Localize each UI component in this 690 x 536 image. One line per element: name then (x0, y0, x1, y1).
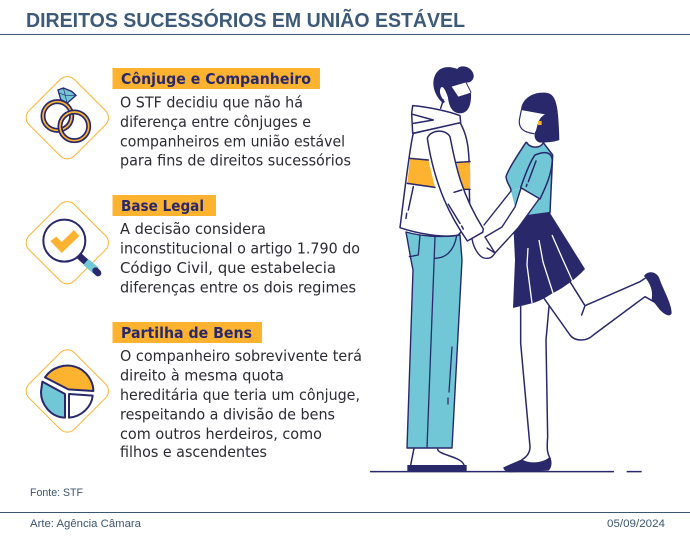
credit: Arte: Agência Câmara (30, 518, 142, 530)
text block: base legal: A decisão considera (120, 220, 266, 238)
text block: partilha de bens: com outros herdeiros, como (120, 425, 322, 443)
text block: base legal: inconstitucional o artigo 1.790 do (120, 240, 360, 258)
icon: pie chart (22, 346, 113, 436)
woman: standing and raised legs (521, 278, 657, 460)
man: jeans pockets (409, 235, 457, 258)
icon: wedding rings (22, 72, 113, 163)
man: hair and beard (433, 66, 474, 113)
heading: partilha de bens: Partilha de Bens (121, 324, 252, 342)
woman: arm (484, 188, 539, 253)
woman: hair and earring (519, 93, 559, 143)
woman: shoes (503, 272, 672, 472)
man: sleeve (427, 131, 483, 241)
woman: skirt (513, 213, 585, 308)
panel: cônjuge e companheiro (22, 68, 351, 170)
heading: cônjuge e companheiro: Cônjuge e Companheiro (121, 70, 311, 88)
woman: shirt sleeve (521, 153, 552, 199)
text block: cônjuge e companheiro: para fins de direitos sucessórios (120, 152, 351, 170)
man: jeans (406, 232, 462, 448)
text block: partilha de bens: respeitando a divisão de bens (120, 406, 335, 424)
text block: partilha de bens: direito à mesma quota (120, 366, 284, 384)
clasped hands (472, 239, 495, 258)
text block: partilha de bens: hereditária que teria um cônjuge, (120, 386, 360, 404)
text block: partilha de bens: filhos e ascendentes (120, 443, 267, 461)
man: hood and torso (400, 100, 470, 236)
text block: cônjuge e companheiro: companheiros em união estável (120, 132, 345, 150)
text block: partilha de bens: O companheiro sobrevivente terá (120, 347, 362, 365)
text block: cônjuge e companheiro: diferença entre cônjuges e (120, 113, 311, 131)
panel: partilha de bens (22, 322, 362, 461)
icon: magnifying glass with check (22, 197, 113, 288)
text block: partilha de bens (120, 347, 362, 461)
man: shoe (407, 448, 467, 471)
source note: Fonte: STF (30, 487, 83, 499)
man: jeans seam and creases (427, 237, 452, 448)
text block: cônjuge e companheiro: O STF decidiu que não há (120, 94, 303, 112)
heading: base legal: Base Legal (121, 197, 204, 215)
date: 05/09/2024 (607, 518, 665, 530)
text block: base legal (120, 220, 360, 296)
text block: cônjuge e companheiro (120, 94, 351, 170)
text block: base legal: diferenças entre os dois regimes (120, 278, 356, 296)
ground line (370, 469, 642, 474)
woman: shirt (506, 142, 553, 217)
illustration: couple holding hands (370, 66, 672, 472)
panel: base legal (22, 195, 360, 296)
text block: base legal: Código Civil, que estabelecia (120, 259, 336, 277)
title: DIREITOS SUCESSÓRIOS EM UNIÃO ESTÁVEL (26, 8, 465, 32)
